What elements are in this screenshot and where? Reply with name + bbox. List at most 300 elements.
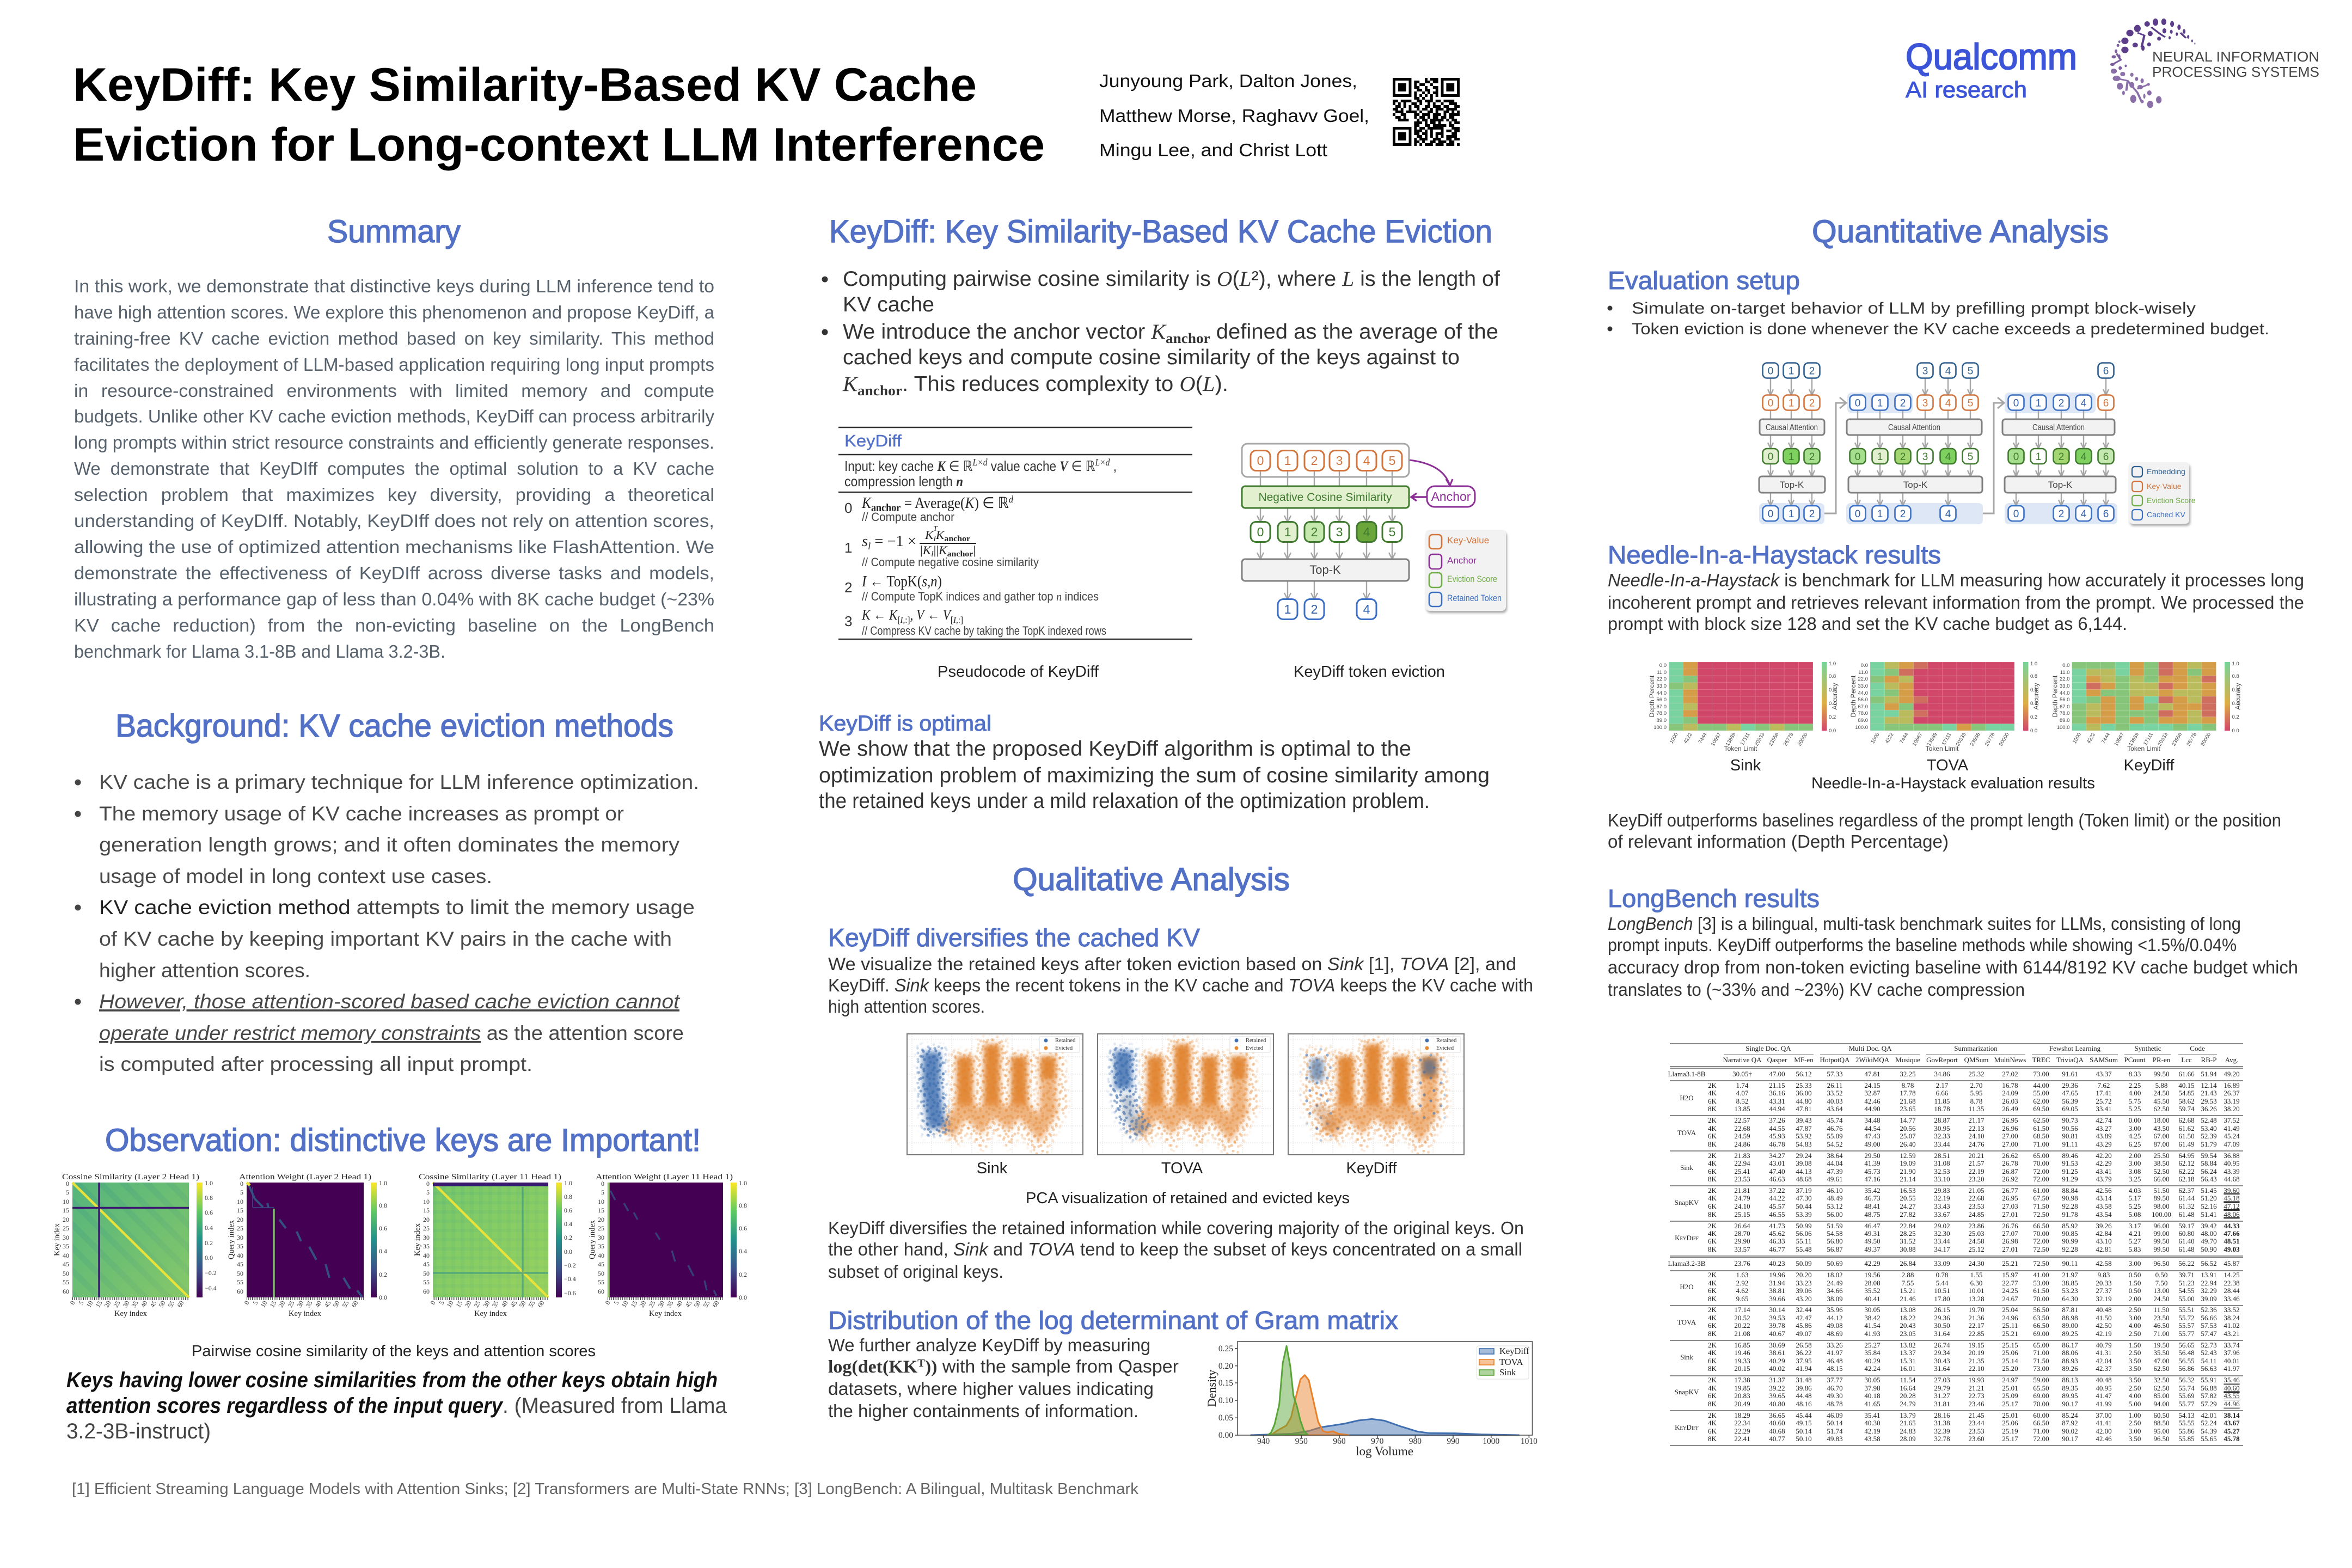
heatmap: TOVA accuracy: 0.4	[2030, 701, 2037, 707]
LongBench results table: 88.84	[2062, 1186, 2078, 1195]
LongBench results table: 70.00	[2033, 1229, 2049, 1238]
LongBench results table: 42.58	[2096, 1259, 2112, 1267]
heatmap labels	[1730, 757, 2175, 774]
LongBench results table: 26.84	[1900, 1259, 1916, 1267]
LongBench results table: 5.88	[2155, 1081, 2167, 1089]
LongBench results table: 37.00	[2096, 1411, 2112, 1419]
pseudocode table: // Compute anchor	[862, 510, 954, 524]
summary paragraph: In this work, we demonstrate that distinctive keys during LLM inference tend to	[74, 276, 714, 296]
heatmap: Sink accuracy: 0.4	[1829, 701, 1836, 707]
key-value and cached tokens: 5	[1968, 397, 1973, 409]
heatmap: cosine similarity layer 11: 5	[437, 1299, 446, 1306]
LongBench results table: 55.74	[2178, 1384, 2195, 1392]
LongBench results table: 8K	[1708, 1364, 1717, 1373]
LongBench results table: 20.49	[1734, 1400, 1750, 1408]
LongBench results table: 40.01	[2224, 1357, 2240, 1365]
distribution text: log(det(KK	[828, 1357, 917, 1377]
heatmap: TOVA accuracy: 7444	[1899, 732, 1910, 745]
LongBench results table: 23.44	[1968, 1419, 1984, 1427]
diversity conclusion text	[828, 1218, 1524, 1282]
LongBench results table: 69.00	[2033, 1330, 2049, 1338]
LongBench results table: 2.00	[2129, 1152, 2141, 1160]
LongBench results table: 59.00	[2033, 1376, 2049, 1384]
LongBench results table: 41.73	[1769, 1222, 1785, 1230]
LongBench results table: 44.90	[1864, 1105, 1881, 1113]
heatmap: cosine similarity layer 11: 60	[423, 1288, 430, 1295]
title: Eviction for Long-context LLM Interference	[73, 119, 1045, 171]
density chart: 0.25	[1218, 1344, 1233, 1353]
LongBench results table: 87.81	[2062, 1306, 2078, 1314]
LongBench results table: 69.00	[2033, 1392, 2049, 1400]
heatmap: attention weight layer 11: 45	[683, 1299, 694, 1309]
LongBench results table: 42.01	[2201, 1411, 2217, 1419]
LongBench results table: 11.35	[1969, 1105, 1984, 1113]
LongBench results table: 27.00	[2002, 1132, 2018, 1140]
LongBench results table: 26.62	[2002, 1152, 2018, 1160]
LongBench results table: 42.19	[2096, 1330, 2112, 1338]
LongBench results table: 42.29	[2096, 1159, 2112, 1167]
LongBench results table: 50.99	[1796, 1222, 1812, 1230]
LongBench results table: 26.40	[1900, 1140, 1916, 1148]
LongBench results table: 21.68	[1900, 1097, 1916, 1105]
LongBench results table: 42.00	[2096, 1427, 2112, 1435]
LongBench results table: 20.83	[1734, 1392, 1750, 1400]
subheading: Distribution: Distribution of the log determinant of Gram matrix	[828, 1306, 1398, 1334]
LongBench results table: 23.53	[1968, 1202, 1984, 1210]
diversify text: KeyDiff. Sink keeps the recent tokens in the KV cache and TOVA keeps the KV cache with	[828, 975, 1533, 995]
retained cached tokens: 0	[1768, 509, 1773, 520]
LongBench results table: 32.78	[1934, 1435, 1950, 1443]
LongBench results table: 41.99	[2096, 1400, 2112, 1408]
LongBench results table: 41.31	[2096, 1349, 2112, 1357]
LongBench results table: 11.85	[1934, 1097, 1950, 1105]
LongBench results table: 49.83	[1827, 1435, 1843, 1443]
LongBench results table: 45.24	[2224, 1132, 2240, 1140]
heatmap: attention weight layer 2: Query index	[227, 1220, 236, 1259]
LongBench results table: 46.63	[1769, 1175, 1785, 1183]
LongBench results table: 25.01	[2002, 1384, 2018, 1392]
LongBench results table: 33.74	[2224, 1341, 2240, 1349]
LongBench results table: 43.20	[1796, 1295, 1812, 1303]
LongBench results table: 41.97	[2224, 1364, 2240, 1373]
heatmap: attention weight layer 2: 25	[237, 1224, 243, 1232]
heatmap: cosine similarity layer 2: 45	[148, 1299, 158, 1309]
LongBench results table: 62.50	[2033, 1116, 2049, 1124]
LongBench results table: 39.78	[1769, 1321, 1785, 1330]
LongBench results table: 21.05	[1968, 1186, 1984, 1195]
pseudocode table: L×d	[972, 457, 988, 468]
LongBench results table: 49.07	[1796, 1330, 1812, 1338]
LongBench results table: 66.50	[2033, 1222, 2049, 1230]
LongBench results table: 45.73	[1864, 1167, 1881, 1175]
LongBench results table: 47.66	[2224, 1229, 2240, 1238]
embedding tokens: 2	[1809, 366, 1815, 377]
heatmap: TOVA accuracy: 23556	[1969, 732, 1982, 747]
QR code	[1393, 79, 1460, 145]
LongBench results table: 28.44	[2224, 1287, 2240, 1295]
embedding tokens: 6	[2103, 366, 2109, 377]
heatmap: attention weight layer 2: 0.2	[379, 1271, 387, 1278]
bullet list: cached keys and compute cosine similarity of the keys against to	[843, 346, 1460, 369]
LongBench results table: 47.00	[1769, 1070, 1785, 1078]
heatmap: cosine similarity layer 2: 35	[63, 1242, 69, 1250]
heatmap: cosine similarity layer 2: −0.2	[205, 1269, 217, 1277]
LongBench results table: 41.47	[2096, 1392, 2112, 1400]
heatmap: cosine similarity layer 2: 30	[63, 1234, 69, 1241]
heatmap: cosine similarity layer 11: Cossine Similarity (Layer 11 Head 1)	[419, 1173, 561, 1181]
LongBench results table: 4.21	[2129, 1229, 2141, 1238]
LongBench results table: 29.53	[2201, 1097, 2217, 1105]
heatmap: attention weight layer 11: Attention Weight (Layer 11 Head 1)	[596, 1173, 733, 1181]
LongBench results table: 33.43	[1934, 1202, 1950, 1210]
LongBench results table: 40.48	[2096, 1306, 2112, 1314]
LongBench results table: 6.30	[1970, 1279, 1982, 1287]
LongBench results table: 40.02	[1769, 1364, 1785, 1373]
LongBench results table: 40.41	[1864, 1295, 1881, 1303]
LongBench results table: 56.39	[2062, 1097, 2078, 1105]
heatmap: TOVA accuracy: 44.0	[1858, 690, 1868, 696]
LongBench results table: 72.00	[2033, 1435, 2049, 1443]
scatter labels: TOVA	[1161, 1160, 1203, 1177]
heatmap: cosine similarity layer 11: 40	[499, 1299, 510, 1309]
pseudocode table: ,	[910, 607, 916, 623]
heatmap: cosine similarity layer 2: 45	[63, 1260, 69, 1268]
LongBench results table: 31.37	[1769, 1376, 1785, 1384]
LongBench results table: 37.96	[2224, 1349, 2240, 1357]
LongBench results table: 47.30	[1796, 1194, 1812, 1202]
density chart: Sink	[1499, 1367, 1516, 1377]
eviction score tokens: 2	[1900, 451, 1906, 463]
LongBench results table: 43.31	[1769, 1097, 1785, 1105]
heatmap: TOVA accuracy: 89.0	[1858, 718, 1868, 724]
LongBench results table: 91.11	[2062, 1140, 2078, 1148]
heatmap: KeyDiff accuracy: 67.0	[2060, 704, 2070, 710]
LongBench results table: 41.49	[2224, 1124, 2240, 1132]
LongBench results table: 4K	[1708, 1349, 1717, 1357]
LongBench results table: 29.90	[1734, 1237, 1750, 1245]
eviction score tokens: 0	[1257, 525, 1264, 539]
LongBench results table: 2K	[1708, 1376, 1717, 1384]
key-value tokens: 2	[1311, 454, 1318, 468]
LongBench results table: 20.20	[1796, 1271, 1812, 1279]
LongBench results table: 22.77	[2002, 1279, 2018, 1287]
LongBench results table: 8K	[1708, 1105, 1717, 1113]
arrow: cache to anchor	[1410, 460, 1453, 486]
LongBench results table: 8.33	[2129, 1070, 2141, 1078]
LongBench results table: 69.05	[2062, 1105, 2078, 1113]
LongBench results table: 24.30	[1968, 1259, 1984, 1267]
key-value and cached tokens: 2	[1809, 397, 1815, 409]
LongBench results table: 23.65	[1900, 1105, 1916, 1113]
summary paragraph: understanding of KeyDIff. Notably, KeyDIff does not rely on attention scores,	[74, 511, 714, 531]
LongBench results table: 47.09	[2224, 1140, 2240, 1148]
pseudocode table: V ← V	[916, 607, 952, 623]
LongBench results table: 6K	[1708, 1202, 1717, 1210]
LongBench results table: Musique	[1895, 1056, 1920, 1064]
LongBench results table: 42.24	[1864, 1364, 1881, 1373]
arrow: step 2 to step 3	[1983, 397, 2004, 513]
LongBench results table: 88.50	[2153, 1419, 2170, 1427]
heatmap: cosine similarity layer 11: 0.6	[564, 1206, 572, 1214]
LongBench results table: 56.65	[2178, 1341, 2195, 1349]
retained cached tokens: 1	[1788, 509, 1794, 520]
LongBench results table: 6K	[1708, 1287, 1717, 1295]
LongBench results table: MF-en	[1794, 1056, 1814, 1064]
LongBench results table: Code	[2190, 1044, 2205, 1052]
LongBench results table: 57.47	[2201, 1330, 2217, 1338]
LongBench results table: 61.00	[2033, 1186, 2049, 1195]
LongBench results table: 62.68	[2178, 1116, 2195, 1124]
LongBench results table: 39.60	[2224, 1186, 2240, 1195]
heatmap labels: KeyDiff	[2124, 757, 2175, 774]
summary paragraph: KV cache reduction) from the non-evicting baseline on the LongBench	[74, 615, 714, 635]
LongBench results table: 44.80	[1796, 1097, 1812, 1105]
LongBench results table: 94.00	[2153, 1400, 2170, 1408]
LongBench results table: 99.50	[2153, 1245, 2170, 1253]
LongBench results table: 49.00	[1864, 1140, 1881, 1148]
causal attention boxes: Causal Attention	[1766, 423, 1818, 432]
LongBench results table: 85.92	[2062, 1222, 2078, 1230]
diversity conclusion text: the other hand, Sink and TOVA tend to keep the subset of keys concentrated on a small	[828, 1239, 1522, 1259]
LongBench results table: 58.62	[2178, 1097, 2195, 1105]
bullet list: generation length grows; and it often dominates the memory	[99, 834, 680, 856]
LongBench results table: 68.50	[2033, 1132, 2049, 1140]
heatmap: attention weight layer 2: 10	[259, 1299, 269, 1309]
heatmap: KeyDiff accuracy: 17111	[2142, 732, 2154, 746]
LongBench results table: 35.42	[1864, 1186, 1881, 1195]
LongBench results table: 52.24	[2201, 1419, 2217, 1427]
pseudocode table: K	[938, 543, 948, 557]
key-value and cached tokens: 6	[2103, 397, 2109, 409]
heatmap: cosine similarity layer 2: 10	[63, 1198, 69, 1205]
LongBench results table: 44.94	[1769, 1105, 1785, 1113]
LongBench results table: 56.86	[2178, 1364, 2195, 1373]
LongBench results table: 50.14	[1827, 1419, 1843, 1427]
heatmap: attention weight layer 2: 30	[295, 1299, 305, 1309]
key-value and cached tokens: 2	[1900, 397, 1906, 409]
heatmap: attention weight layer 11	[588, 1173, 747, 1318]
LongBench results table: 2.00	[2129, 1295, 2141, 1303]
LongBench results table: 62.50	[2153, 1364, 2170, 1373]
LongBench results table: Fewshot Learning	[2049, 1044, 2100, 1052]
heatmap: TOVA accuracy: 4222	[1884, 732, 1895, 745]
pseudocode table: K	[861, 495, 872, 512]
LongBench results table: 62.12	[2178, 1159, 2195, 1167]
LongBench results table: 22.19	[1968, 1167, 1984, 1175]
LongBench results table: 22.29	[1734, 1427, 1750, 1435]
LongBench results table: 39.06	[1796, 1287, 1812, 1295]
LongBench results table: 4K	[1708, 1124, 1717, 1132]
LongBench results table: 4.62	[1736, 1287, 1748, 1295]
key-value and cached tokens: 1	[1788, 397, 1794, 409]
pseudocode table: |K	[920, 543, 930, 557]
heatmap: cosine similarity layer 2: 40	[63, 1252, 69, 1259]
LongBench results table: 2K	[1708, 1222, 1717, 1230]
key-value and cached tokens: 2	[2059, 397, 2064, 409]
retained tokens: 4	[1363, 602, 1370, 616]
heatmap: cosine similarity layer 11: 40	[423, 1252, 430, 1259]
retained cached tokens: 2	[2059, 509, 2064, 520]
needle text: Needle-In-a-Haystack is benchmark for LLM measuring how accurately it processes long	[1608, 570, 2304, 590]
negative cosine similarity box	[1242, 486, 1409, 508]
eviction score tokens: 4	[2081, 451, 2087, 463]
LongBench results table: 36.16	[1769, 1089, 1785, 1097]
LongBench results table: 39.09	[2201, 1295, 2217, 1303]
LongBench results table: 49.50	[1864, 1237, 1881, 1245]
LongBench results table: KeyDiff	[1675, 1234, 1699, 1242]
heatmap: Sink accuracy: 56.0	[1656, 697, 1667, 703]
LongBench results table: 33.67	[1934, 1210, 1950, 1218]
LongBench results table: 5.95	[1970, 1089, 1982, 1097]
heatmap: cosine similarity layer 2: 0	[68, 1299, 77, 1306]
summary paragraph: training-free KV cache eviction method based on key similarity. This method	[74, 328, 714, 348]
heatmap: cosine similarity layer 2: Key index	[114, 1309, 148, 1318]
LongBench results table: 39.43	[1796, 1116, 1812, 1124]
heatmap: cosine similarity layer 2: 0.0	[205, 1254, 213, 1261]
pseudocode table: 1	[844, 540, 852, 556]
LongBench results table: 18.29	[1734, 1411, 1750, 1419]
heatmap: Sink accuracy: 26778	[1783, 732, 1795, 747]
LongBench results table: 20.28	[1900, 1392, 1916, 1400]
LongBench results table: 21.45	[1968, 1411, 1984, 1419]
key-value and cached tokens: 0	[1855, 397, 1860, 409]
LongBench results table: 38.61	[1769, 1349, 1785, 1357]
LongBench results table: 40.18	[1864, 1392, 1881, 1400]
LongBench results table: 1.50	[2129, 1341, 2141, 1349]
LongBench results table: 20.56	[1900, 1124, 1916, 1132]
heatmap: cosine similarity layer 2: 40	[139, 1299, 149, 1309]
LongBench results table: 48.68	[1796, 1175, 1812, 1183]
heading: KeyDiff eviction: KeyDiff: Key Similarity-Based KV Cache Eviction	[829, 214, 1492, 249]
arrow: step 1 to step 2	[1824, 397, 1846, 513]
heatmap: TOVA accuracy: 22.0	[1858, 676, 1868, 682]
LongBench results table: 55.77	[2178, 1400, 2195, 1408]
LongBench results table: QMSum	[1964, 1056, 1988, 1064]
LongBench results table: 60.00	[2033, 1411, 2049, 1419]
heatmap: KeyDiff accuracy: 89.0	[2060, 718, 2070, 724]
LongBench results table: 25.12	[1968, 1245, 1984, 1253]
LongBench results table: 1.50	[2129, 1279, 2141, 1287]
LongBench results table: 8.78	[1902, 1081, 1914, 1089]
LongBench results table: 25.20	[2002, 1364, 2018, 1373]
LongBench results table: 56.66	[2201, 1314, 2217, 1322]
heatmap: cosine similarity layer 11: Key index	[413, 1223, 422, 1256]
density chart: 1010	[1521, 1437, 1538, 1446]
key finding text: attention scores regardless of the input query	[66, 1394, 504, 1418]
LongBench results table: 62.37	[2178, 1186, 2195, 1195]
LongBench results table: 41.65	[1864, 1400, 1881, 1408]
LongBench results table: 55.57	[2178, 1321, 2195, 1330]
heatmap: attention weight layer 11: 0	[603, 1299, 612, 1306]
LongBench results table: 5.17	[2129, 1194, 2141, 1202]
LongBench results table: 19.56	[1864, 1271, 1881, 1279]
LongBench results table: TREC	[2032, 1056, 2050, 1064]
heatmap: attention weight layer 11: 55	[701, 1299, 712, 1309]
LongBench results table: 24.10	[1968, 1132, 1984, 1140]
LongBench results table: 54.58	[1827, 1229, 1843, 1238]
LongBench results table: 21.35	[1968, 1357, 1984, 1365]
LongBench results table: 47.16	[1864, 1175, 1881, 1183]
heatmap: KeyDiff accuracy: 1000	[2072, 732, 2082, 745]
LongBench results table: 5.83	[2129, 1245, 2141, 1253]
LongBench results table: 43.37	[2096, 1070, 2112, 1078]
key finding text: 3.2-3B-instruct)	[66, 1419, 211, 1443]
LongBench results table: 89.95	[2062, 1392, 2078, 1400]
top-k boxes: Top-K	[1903, 480, 1928, 490]
heatmap: cosine similarity layer 2: 55	[63, 1278, 69, 1286]
LongBench results table: 23.53	[1734, 1175, 1750, 1183]
heatmap: attention weight layer 2: Key index	[289, 1309, 322, 1318]
distribution text: We further analyze KeyDiff by measuring	[828, 1335, 1150, 1355]
LongBench results table: 53.00	[2033, 1279, 2049, 1287]
LongBench results table: 25.15	[1734, 1210, 1750, 1218]
LongBench results table: 91.61	[2062, 1070, 2078, 1078]
LongBench results table: 61.40	[2178, 1237, 2195, 1245]
LongBench results table: 24.97	[2002, 1376, 2018, 1384]
LongBench results table: 30.50	[1934, 1321, 1950, 1330]
heatmap: Sink accuracy: 1.0	[1829, 661, 1836, 667]
LongBench results table: 66.50	[2033, 1321, 2049, 1330]
summary paragraph: We demonstrate that KeyDIff computes the optimal solution to a KV cache	[74, 458, 714, 479]
LongBench results table: 36.00	[1796, 1089, 1812, 1097]
LongBench results table: 40.30	[1864, 1419, 1881, 1427]
longbench text: accuracy drop from non-token evicting baseline with 6144/8192 KV cache budget which	[1608, 957, 2298, 977]
top-k box	[1242, 559, 1409, 581]
LongBench results table: 51.20	[2201, 1194, 2217, 1202]
LongBench results table: 0.50	[2129, 1271, 2141, 1279]
logo: Qualcomm AI research: AI research	[1906, 77, 2027, 102]
eviction score tokens	[1763, 449, 2114, 464]
LongBench results table: 0.78	[1936, 1271, 1948, 1279]
LongBench results table: 72.50	[2033, 1210, 2049, 1218]
authors: Matthew Morse, Raghavv Goel,	[1099, 106, 1369, 126]
LongBench results table: 89.35	[2062, 1384, 2078, 1392]
retained cached tokens: 1	[1877, 509, 1883, 520]
LongBench results table: 6K	[1708, 1237, 1717, 1245]
LongBench results table: 26.96	[2002, 1124, 2018, 1132]
arrow: anchor to similarity	[1411, 493, 1427, 501]
heatmap: KeyDiff accuracy: 0.4	[2232, 701, 2239, 707]
LongBench results table: 21.46	[1900, 1295, 1916, 1303]
LongBench results table: RB-P	[2201, 1056, 2216, 1064]
LongBench results table: 52.43	[2201, 1349, 2217, 1357]
LongBench results table: 99.50	[2153, 1237, 2170, 1245]
LongBench results table: 22.94	[2201, 1279, 2217, 1287]
bullet list: anchor	[1166, 330, 1210, 346]
LongBench results table: 21.15	[1769, 1081, 1785, 1089]
heatmap: cosine similarity layer 11: −0.2	[564, 1261, 576, 1269]
LongBench results table: 49.08	[1827, 1321, 1843, 1330]
legend	[2129, 462, 2196, 524]
subheading: Needle-In-a-Haystack: Needle-In-a-Haystack results	[1608, 541, 1941, 569]
heatmap: TOVA accuracy: Depth Percent	[1849, 675, 1857, 717]
key finding text: Keys having lower cosine similarities from the other keys obtain high	[66, 1368, 718, 1392]
LongBench results table: 47.87	[1796, 1124, 1812, 1132]
heatmap: attention weight layer 11: 40	[598, 1252, 604, 1259]
density chart: 960	[1333, 1437, 1346, 1446]
heatmap: Sink accuracy: 33.0	[1656, 683, 1667, 689]
LongBench results table: 47.65	[2062, 1089, 2078, 1097]
heatmap: KeyDiff accuracy: 100.0	[2057, 725, 2070, 731]
caption: PCA: PCA visualization of retained and evicted keys	[1026, 1190, 1350, 1207]
heatmap: cosine similarity layer 11: 15	[454, 1299, 464, 1309]
LongBench results table: 56.50	[2033, 1306, 2049, 1314]
LongBench results table: 42.84	[2096, 1229, 2112, 1238]
LongBench results table: 2K	[1708, 1411, 1717, 1419]
LongBench results table: 40.60	[1769, 1419, 1785, 1427]
pseudocode table: K) ∈ ℝ	[965, 495, 1012, 512]
LongBench results table: 4K	[1708, 1229, 1717, 1238]
